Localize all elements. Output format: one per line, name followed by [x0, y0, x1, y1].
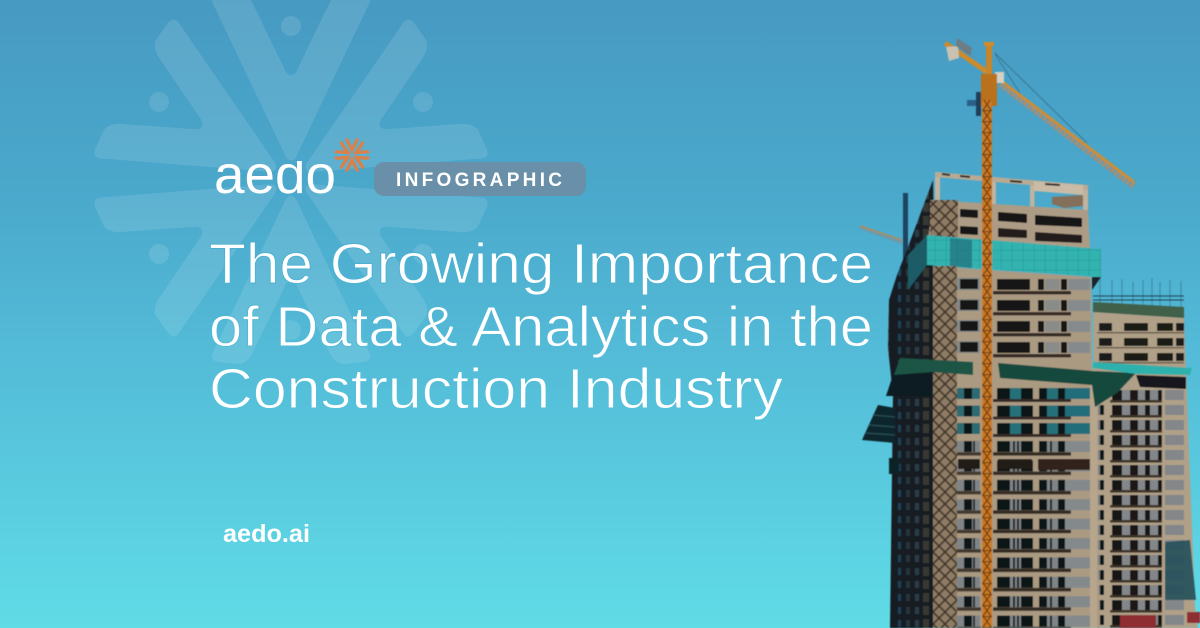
crane counter jib and counterweight	[945, 38, 987, 72]
website url: aedo.ai	[223, 520, 310, 548]
photo: building under construction with crane	[860, 38, 1200, 628]
rooftop frame	[935, 172, 1088, 212]
tower crane	[945, 38, 1134, 628]
crane cab	[967, 42, 1004, 116]
watermark: large aedo star	[90, 0, 492, 364]
title: The Growing Importance	[209, 232, 873, 296]
crane jib	[1000, 80, 1134, 186]
signage at base	[1120, 612, 1200, 628]
front face of main tower	[933, 266, 1101, 628]
logo: aedo wordmark with orange star	[216, 138, 370, 194]
icon: orange star	[334, 138, 370, 172]
badge: infographic: INFOGRAPHIC	[396, 170, 562, 191]
crane mast	[982, 100, 992, 628]
hanging work platform	[862, 405, 899, 474]
upper floors	[928, 200, 1090, 250]
crane cables	[995, 53, 1087, 143]
title: Construction Industry	[209, 357, 784, 421]
wordmark: aedo	[214, 145, 336, 205]
teal safety netting	[908, 235, 1101, 290]
distant crane	[860, 193, 908, 263]
badge: infographic	[374, 162, 586, 196]
right tower	[1093, 278, 1198, 628]
title: of Data & Analytics in the	[209, 295, 873, 359]
left dark face of tower	[888, 180, 934, 628]
green ledge and teal catch platform	[886, 358, 1192, 407]
title	[209, 232, 873, 421]
